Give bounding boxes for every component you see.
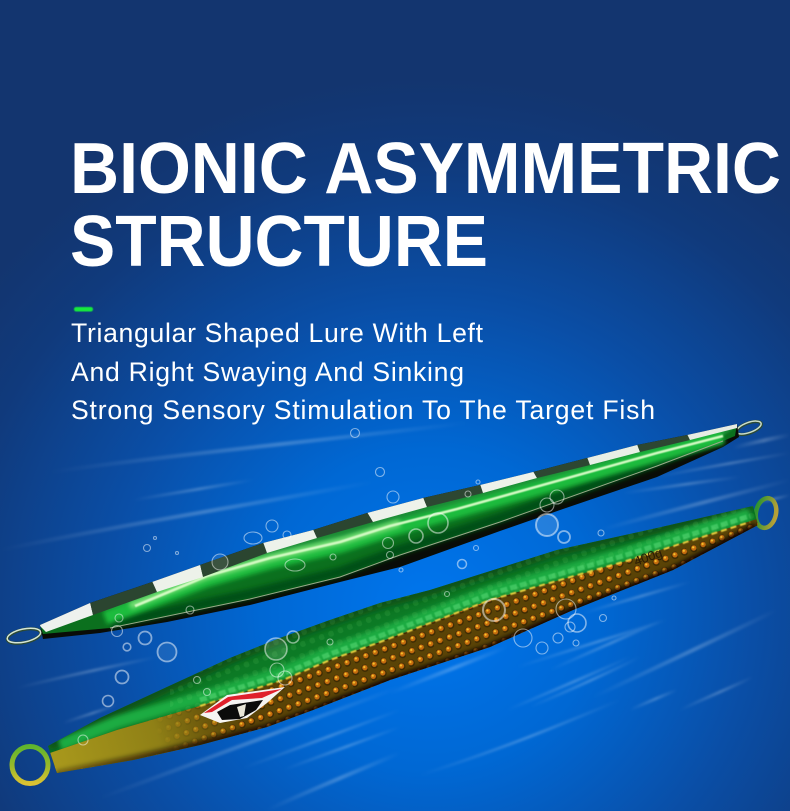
eye decal — [200, 687, 285, 723]
description text: And Right Swaying And Sinking — [71, 357, 464, 387]
dark and white back stripes — [36, 423, 737, 632]
weight marking: 400g — [632, 545, 664, 569]
ring left — [12, 746, 48, 784]
title — [70, 128, 781, 282]
eyelet right — [735, 418, 763, 437]
lure: striped green jig (top) — [0, 400, 790, 660]
ring right — [753, 496, 779, 530]
lure: green and gold jig (bottom) — [0, 480, 790, 790]
lure body — [40, 424, 739, 639]
description text: Triangular Shaped Lure With Left — [71, 318, 484, 348]
lure body — [48, 506, 758, 773]
title: STRUCTURE — [70, 201, 488, 282]
water streaks — [0, 423, 790, 810]
air bubbles — [78, 428, 616, 745]
description text: Strong Sensory Stimulation To The Target Fish — [71, 395, 655, 425]
eyelet left — [6, 626, 42, 646]
green accent dash — [74, 307, 93, 312]
description text — [71, 318, 655, 425]
gold flank with dot scales — [50, 519, 758, 773]
